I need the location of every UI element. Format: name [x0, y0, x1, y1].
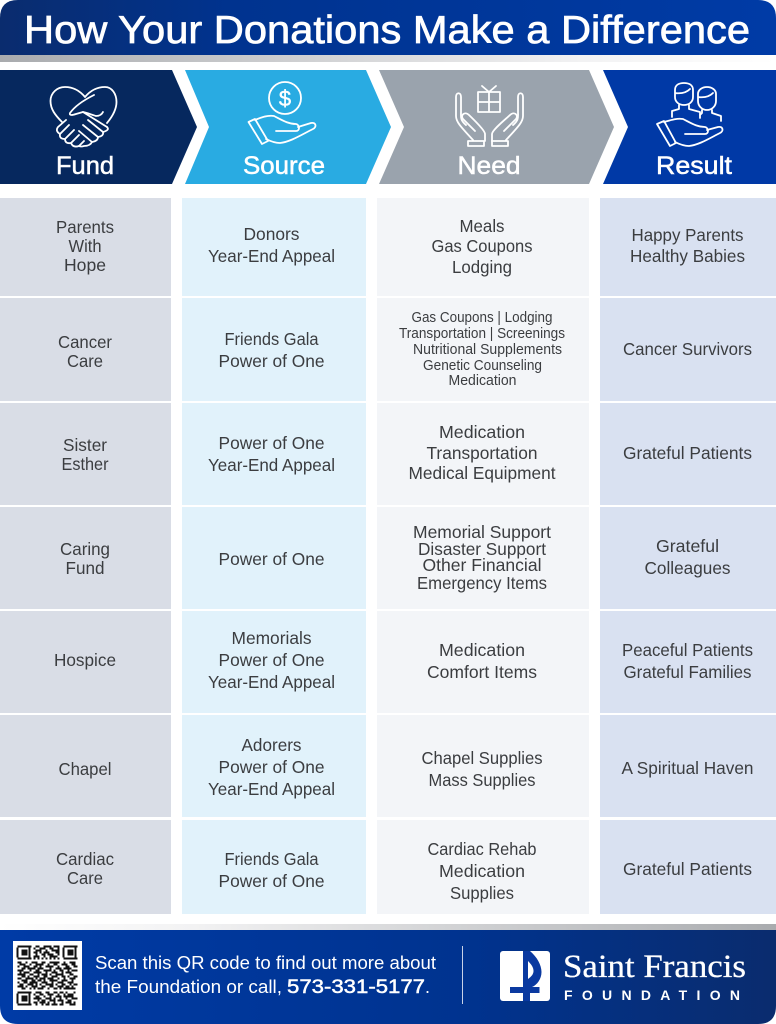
header chevron: Need	[379, 70, 614, 184]
result: Parents With Hope row	[630, 225, 745, 266]
source: Parents With Hope row: Donors	[244, 224, 300, 244]
need: Cardiac Care row	[428, 839, 536, 903]
source: Chapel row: Year-End Appeal	[208, 779, 335, 799]
source: Cardiac Care row: Friends Gala	[224, 849, 319, 869]
source: Chapel row	[208, 735, 335, 799]
need: Caring Fund row: Disaster Support	[418, 539, 546, 559]
result: Chapel row: A Spiritual Haven	[622, 758, 754, 778]
result: Sister Esther row: Grateful Patients	[623, 443, 752, 463]
need: Sister Esther row	[408, 422, 556, 483]
label: Need: Need	[458, 152, 520, 180]
logo wordmark	[563, 949, 746, 1003]
source: Cardiac Care row: Power of One	[218, 871, 324, 891]
result: Hospice row: Grateful Families	[624, 662, 752, 682]
result: Caring Fund row: Grateful	[656, 536, 719, 556]
fund: Hospice: Hospice	[54, 650, 116, 670]
source: Cancer Care row	[218, 329, 324, 371]
need: Cancer Care row: Genetic Counseling	[423, 357, 542, 374]
source: Hospice row: Year-End Appeal	[208, 672, 335, 692]
header chevron: Source	[185, 70, 391, 184]
fund: Parents With Hope: Hope	[64, 255, 106, 275]
label: Source: Source	[243, 152, 325, 180]
source: Chapel row: Adorers	[242, 735, 302, 755]
source: Caring Fund row: Power of One	[218, 549, 324, 569]
footer call to action: 573-331-5177	[287, 976, 425, 998]
need: Caring Fund row: Other Financial	[422, 555, 542, 575]
panel: Need column	[377, 198, 589, 914]
need: Hospice row: Medication	[439, 640, 525, 660]
source: Chapel row: Power of One	[218, 757, 324, 777]
title: How Your Donations Make a Difference	[24, 9, 750, 52]
result: Cardiac Care row: Grateful Patients	[623, 859, 752, 879]
footer band	[0, 924, 776, 1024]
fund: Cardiac Care: Care	[67, 868, 103, 888]
need: Hospice row: Comfort Items	[427, 662, 537, 682]
need: Sister Esther row: Medication	[439, 422, 525, 442]
footer call to action: Scan this QR code to find out more about	[95, 952, 436, 973]
panel: Fund column	[0, 198, 171, 914]
need: Cancer Care row: Gas Coupons | Lodging	[412, 309, 552, 326]
result: Hospice row	[622, 640, 753, 682]
icon: coin over open hand: $	[279, 86, 291, 111]
label: Fund: Fund	[56, 152, 114, 180]
need: Caring Fund row	[413, 522, 551, 593]
need: Parents With Hope row	[432, 216, 533, 277]
fund: Sister Esther	[62, 435, 109, 474]
source: Hospice row	[208, 628, 335, 692]
source: Hospice row: Memorials	[232, 628, 312, 648]
need: Cancer Care row: Transportation | Screenings	[399, 325, 565, 342]
header chevron: Fund	[0, 70, 197, 184]
fund: Parents With Hope	[56, 217, 114, 275]
source: Hospice row: Power of One	[218, 650, 324, 670]
need: Cancer Care row	[399, 309, 565, 389]
need: Cancer Care row: Nutritional Supplements	[413, 341, 562, 358]
label: Result: Result	[656, 152, 732, 180]
fund: Cardiac Care: Cardiac	[56, 849, 114, 869]
logo mark	[500, 951, 550, 1001]
need: Cardiac Care row: Supplies	[450, 883, 514, 903]
footer call to action	[95, 952, 436, 998]
icon: coin over open hand	[248, 82, 315, 144]
need: Parents With Hope row: Meals	[460, 216, 505, 236]
need: Parents With Hope row: Gas Coupons	[432, 236, 533, 256]
result: Hospice row: Peaceful Patients	[622, 640, 753, 660]
footer call to action: the Foundation or call,	[95, 976, 282, 997]
need: Sister Esther row: Medical Equipment	[408, 463, 556, 483]
result: Cancer Care row: Cancer Survivors	[623, 339, 752, 359]
need: Cancer Care row: Medication	[448, 372, 516, 389]
source: Parents With Hope row: Year-End Appeal	[208, 246, 335, 266]
need: Chapel row: Chapel Supplies	[422, 748, 543, 768]
need: Chapel row	[422, 748, 543, 790]
fund: Cancer Care	[58, 332, 112, 371]
fund: Parents With Hope: Parents	[56, 217, 114, 237]
need: Chapel row: Mass Supplies	[428, 770, 536, 790]
logo wordmark: FOUNDATION	[564, 987, 740, 1003]
need: Hospice row	[427, 640, 537, 682]
fund: Caring Fund	[60, 539, 110, 578]
need: Sister Esther row: Transportation	[426, 443, 538, 463]
need: Parents With Hope row: Lodging	[452, 257, 512, 277]
source: Cardiac Care row	[218, 849, 324, 891]
title banner	[0, 0, 776, 62]
need: Cardiac Care row: Medication	[439, 861, 525, 881]
result: Parents With Hope row: Healthy Babies	[630, 246, 745, 266]
fund: Parents With Hope: With	[68, 236, 102, 256]
fund: Cancer Care: Cancer	[58, 332, 112, 352]
source: Sister Esther row	[208, 433, 335, 475]
result: Parents With Hope row: Happy Parents	[632, 225, 744, 245]
panel: Result column	[600, 198, 776, 914]
panel: Source column	[182, 198, 366, 914]
need: Caring Fund row: Emergency Items	[417, 573, 547, 593]
need: Caring Fund row: Memorial Support	[413, 522, 551, 542]
result: Caring Fund row	[644, 536, 731, 578]
icon: heart handshake	[50, 87, 116, 147]
fund: Cardiac Care	[56, 849, 114, 888]
source: Cancer Care row: Friends Gala	[224, 329, 319, 349]
fund: Cancer Care: Care	[67, 351, 103, 371]
source: Sister Esther row: Power of One	[218, 433, 324, 453]
fund: Sister Esther: Sister	[63, 435, 107, 455]
footer call to action: .	[425, 977, 430, 997]
fund: Caring Fund: Fund	[66, 558, 104, 578]
source: Sister Esther row: Year-End Appeal	[208, 455, 335, 475]
source: Cancer Care row: Power of One	[218, 351, 324, 371]
icon: hands holding gift	[456, 86, 523, 146]
fund: Caring Fund: Caring	[60, 539, 110, 559]
fund: Sister Esther: Esther	[62, 454, 109, 474]
icon: two people over open hand	[657, 83, 722, 146]
fund: Chapel: Chapel	[58, 759, 112, 779]
QR code	[13, 941, 82, 1010]
result: Caring Fund row: Colleagues	[644, 558, 731, 578]
logo wordmark: Saint Francis	[563, 949, 746, 985]
source: Parents With Hope row	[208, 224, 335, 266]
header chevron: Result	[603, 70, 776, 184]
need: Cardiac Care row: Cardiac Rehab	[428, 839, 536, 859]
